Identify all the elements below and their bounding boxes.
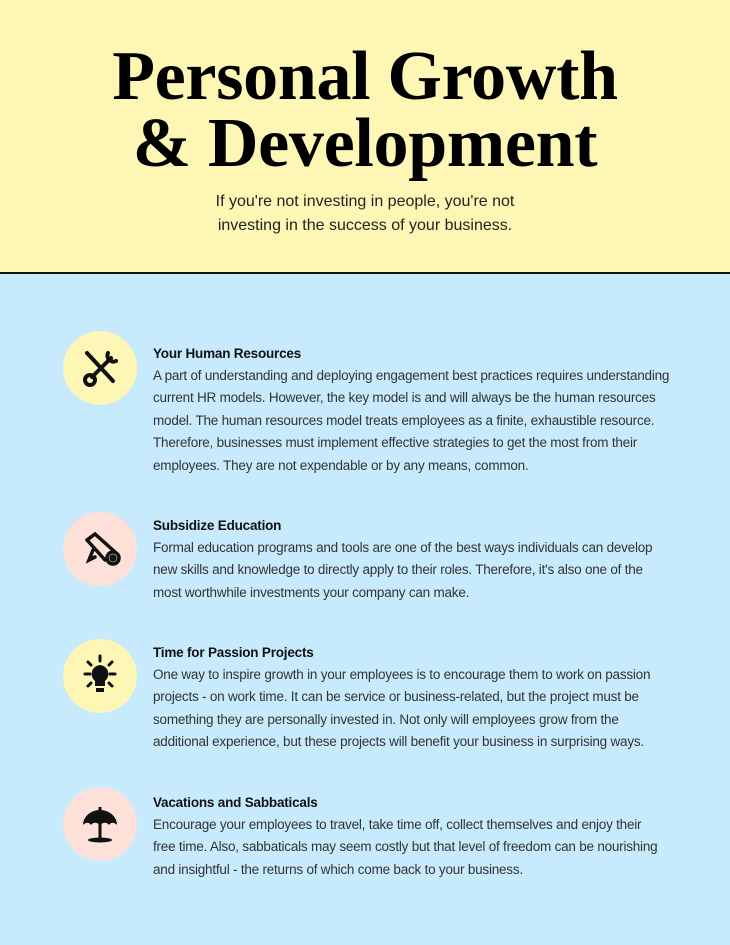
- section: vacations: Encourage your employees to travel, take time off, collect themselves and enjoy their: [153, 817, 641, 832]
- section: education: new skills and knowledge to directly apply to their roles. Therefore, it's also one of the: [153, 562, 643, 577]
- section: passion projects: additional experience, but these projects will benefit your business in surprising ways.: [153, 734, 644, 749]
- section: human resources: model. The human resources model treats employees as a finite, exhaustible resource.: [153, 413, 654, 428]
- subtitle: [216, 193, 514, 234]
- section: passion projects: Time for Passion Projects: [153, 645, 314, 660]
- title: Personal Growth: [112, 38, 618, 115]
- subtitle: investing in the success of your business.: [218, 217, 512, 234]
- section: passion projects: something they are personally invested in. Not only will employees grow from the: [153, 712, 619, 727]
- section: education: most worthwhile investments your company can make.: [153, 585, 469, 600]
- section: human resources: [153, 346, 669, 473]
- section: vacations: and insightful - the returns of which come back to your business.: [153, 862, 523, 877]
- section: human resources: current HR models. However, the key model is and will always be the human resources: [153, 390, 655, 405]
- icon: light bulb: [63, 639, 137, 713]
- section: education: [153, 518, 652, 600]
- section: human resources: Therefore, businesses must implement effective strategies to get the most from their: [153, 435, 637, 450]
- section: human resources: A part of understanding and deploying engagement best practices requires understanding: [153, 368, 669, 383]
- subtitle: If you're not investing in people, you're not: [216, 193, 514, 210]
- title: & Development: [133, 105, 597, 182]
- header panel: [0, 0, 730, 274]
- icon: beach umbrella: [63, 787, 137, 861]
- title: [112, 38, 618, 182]
- section: vacations: Vacations and Sabbaticals: [153, 795, 318, 810]
- section: education: Subsidize Education: [153, 518, 281, 533]
- section: passion projects: One way to inspire growth in your employees is to encourage them to work on passion: [153, 667, 650, 682]
- section: passion projects: projects - on work time. It can be service or business-related, but the project must be: [153, 689, 639, 704]
- section: education: Formal education programs and tools are one of the best ways individuals can develop: [153, 540, 652, 555]
- section: vacations: [153, 795, 657, 877]
- section: human resources: employees. They are not expendable or by any means, common.: [153, 458, 528, 473]
- section: passion projects: [153, 645, 650, 749]
- section: human resources: Your Human Resources: [153, 346, 301, 361]
- icon: diploma: [63, 512, 137, 586]
- icon: tools: [63, 331, 137, 405]
- section: vacations: free time. Also, sabbaticals may seem costly but that level of freedom can be nourishing: [153, 839, 657, 854]
